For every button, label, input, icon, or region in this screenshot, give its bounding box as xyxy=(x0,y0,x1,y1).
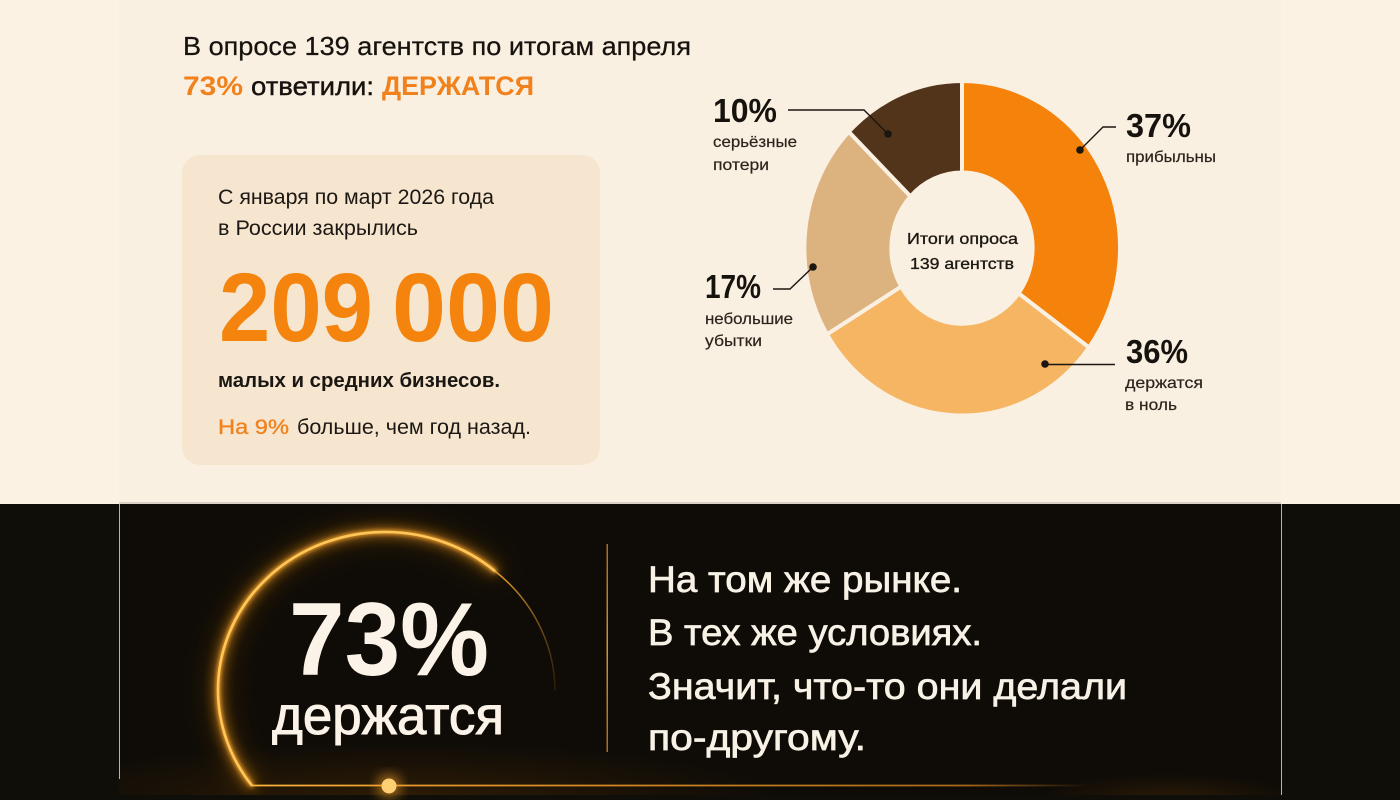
callout: 17% xyxy=(705,263,817,350)
glowing ring xyxy=(218,532,555,785)
headline xyxy=(183,31,691,101)
top panel xyxy=(119,0,1281,503)
base line with dot xyxy=(252,774,1090,798)
donut centre label: 139 агентств xyxy=(910,256,1014,273)
big stat label: держатся xyxy=(272,686,504,746)
banner corner glow xyxy=(1000,740,1281,795)
card intro text: в России закрылись xyxy=(218,217,418,240)
callout: 10%: 10% xyxy=(713,92,777,129)
page background: dark xyxy=(0,504,1400,800)
callout: 36%: в ноль xyxy=(1125,397,1177,414)
segment: 17% small losses xyxy=(804,132,910,334)
card comparison: На 9% xyxy=(218,416,289,439)
big number xyxy=(219,253,554,362)
big number: 000 xyxy=(392,253,554,362)
callout: 10%: серьёзные xyxy=(713,134,797,151)
callout: 36% xyxy=(1041,333,1203,414)
segment: 36% break even xyxy=(827,286,1089,416)
card intro text xyxy=(218,186,494,240)
donut centre label xyxy=(907,231,1018,273)
closing statement: по-другому. xyxy=(648,717,866,758)
donut centre label: Итоги опроса xyxy=(907,231,1018,248)
closing statement: Значит, что-то они делали xyxy=(648,666,1127,707)
callout: 37%: прибыльны xyxy=(1126,149,1216,166)
headline: ДЕРЖАТСЯ xyxy=(382,71,534,101)
card background xyxy=(182,155,600,465)
segment: 37% profitable xyxy=(962,81,1120,347)
callout: 10%: потери xyxy=(713,157,769,174)
big stat: 73%: 73% xyxy=(289,582,489,698)
panel: closures card xyxy=(182,155,600,465)
closing statement: В тех же условиях. xyxy=(648,612,982,653)
callout: 17%: 17% xyxy=(705,268,761,305)
dark banner xyxy=(119,504,1281,795)
callout: 17%: убытки xyxy=(705,333,762,350)
card intro text: С января по март 2026 года xyxy=(218,186,494,209)
headline: 73% xyxy=(183,71,243,101)
card subtext: малых и средних бизнесов. xyxy=(218,370,500,392)
banner floor glow xyxy=(119,722,1281,795)
card comparison: больше, чем год назад. xyxy=(297,416,531,439)
callout: 37%: 37% xyxy=(1126,107,1191,144)
callout: 36%: 36% xyxy=(1126,333,1188,370)
callout: 36%: держатся xyxy=(1125,375,1203,392)
big number: 209 xyxy=(219,253,373,362)
donut chart xyxy=(804,81,1120,416)
callout: 37% xyxy=(1076,107,1216,166)
vertical divider xyxy=(606,544,608,752)
callout: 17%: небольшие xyxy=(705,311,793,328)
closing statement: На том же рынке. xyxy=(648,559,962,600)
closing statement xyxy=(648,559,1127,758)
headline: ответили: xyxy=(251,71,374,101)
headline: В опросе 139 агентств по итогам апреля xyxy=(183,31,691,61)
callout: 10% xyxy=(713,92,892,174)
faint ring continuation xyxy=(495,571,555,690)
banner edge lines xyxy=(119,502,1282,795)
segment: 10% serious losses xyxy=(849,81,962,196)
page background: cream xyxy=(0,0,1400,504)
